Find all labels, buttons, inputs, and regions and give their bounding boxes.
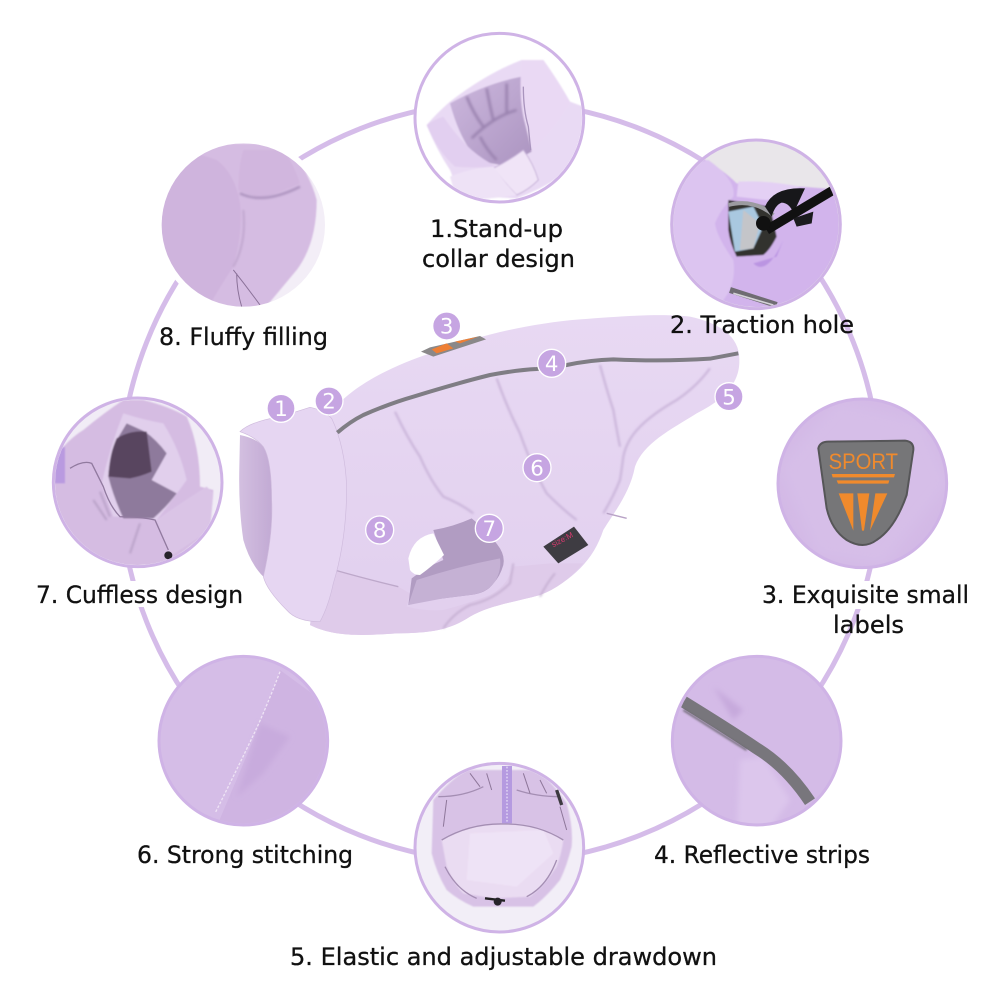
photo circle 8: fluffy filling [162,143,325,307]
reflective strip [337,353,738,433]
photo circle 5: elastic drawdown [415,763,584,932]
small sport label [421,336,486,357]
photo circle 6: strong stitching [159,656,330,827]
lower hem and gathers [310,563,583,635]
label 5: 5. Elastic and adjustable drawdown [290,943,717,971]
marker 7: 7 [483,517,496,542]
marker 2 [315,387,343,415]
label 4: 4. Reflective strips [654,841,870,869]
central vest [239,312,743,635]
marker 5: 5 [722,385,736,410]
marker 1 [267,394,295,422]
seams [395,365,710,520]
marker 6 [523,454,551,482]
label 7: 7. Cuffless design [36,581,243,609]
arm hole [408,533,444,575]
marker 3: 3 [440,315,453,340]
photo circle 4: reflective strip [672,656,841,833]
label 3 [762,581,969,639]
label 3: 3. Exquisite small [762,581,969,609]
connecting ring [110,102,890,862]
badge stripes [839,493,887,531]
badge text: SPORT [829,449,898,474]
marker 4 [538,349,566,377]
photo circle 3: sport label [778,399,950,568]
label 3: labels [833,611,904,639]
marker 3 [433,312,461,340]
marker 4: 4 [545,352,558,377]
vest body [310,315,739,635]
marker 8 [366,516,394,544]
size tag [543,527,588,563]
label 1: 1.Stand-up [430,215,563,243]
label 6: 6. Strong stitching [137,841,353,869]
marker 5 [715,383,743,411]
label 2: 2. Traction hole [670,311,854,339]
marker 6: 6 [530,456,544,481]
size tag: size:M [550,530,575,549]
photo circle 2: traction hole [667,140,847,310]
arm opening lining [408,518,504,605]
marker 8: 8 [373,519,386,544]
marker 7 [475,514,503,542]
photo circle 1: stand-up collar [415,33,584,202]
label 8: 8. Fluffy filling [159,323,328,351]
label 1: collar design [422,245,575,273]
marker 2: 2 [322,390,336,415]
collar band [240,407,347,622]
photo circle 7: cuffless design [50,398,222,570]
badge shape [818,441,913,545]
marker 1: 1 [274,397,288,422]
label 1 [422,215,575,273]
collar inner lining [239,435,272,577]
